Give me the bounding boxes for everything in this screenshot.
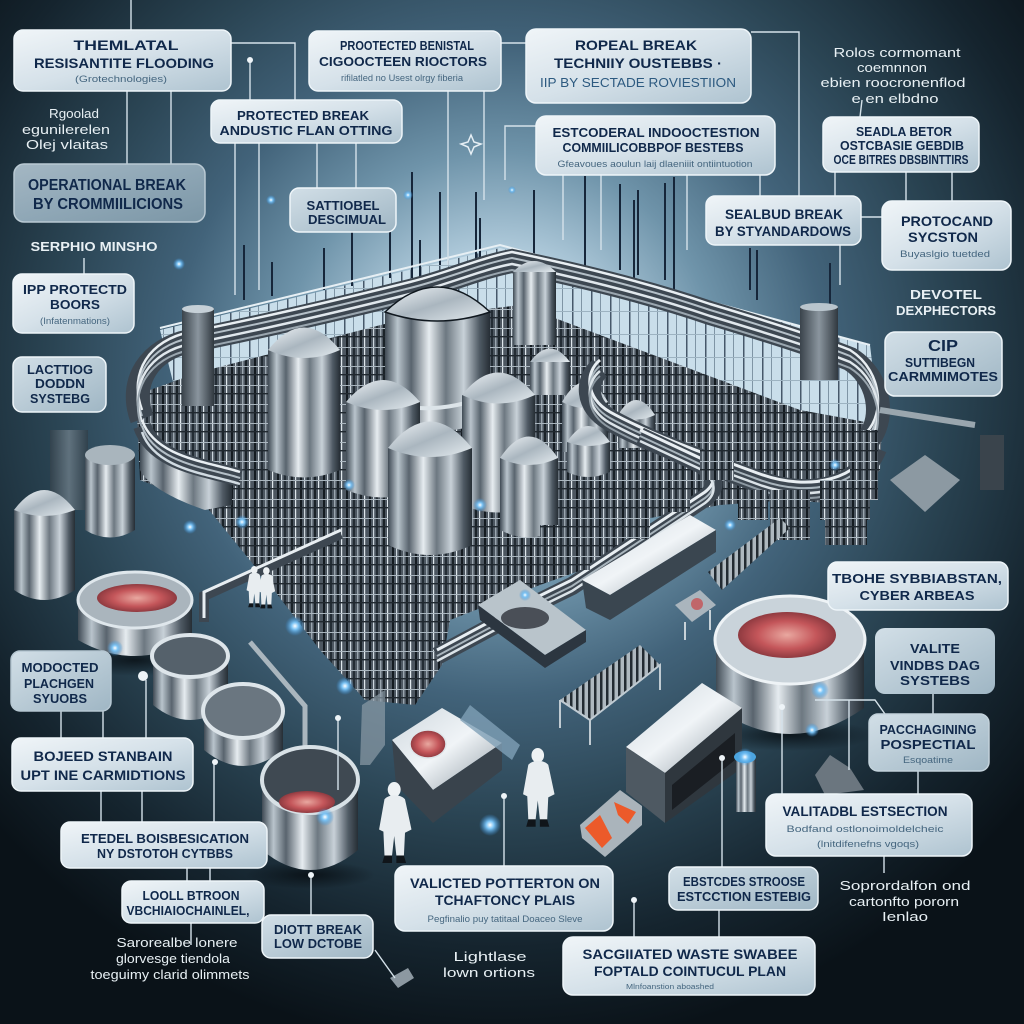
tray rack — [708, 518, 790, 590]
callout: operational break — [14, 164, 205, 222]
callout: sattiobel: DESCIMUAL — [308, 213, 386, 227]
left frame machine — [50, 430, 88, 510]
callout: CIP: SUTTIBEGN — [905, 356, 975, 370]
callout: cyber areas: CYBER ARBEAS — [860, 589, 974, 603]
callout: sealed break: BY STYANDARDOWS — [715, 223, 851, 239]
tank: centre — [462, 372, 535, 512]
left silo — [14, 490, 75, 600]
tank: front right — [500, 436, 558, 538]
callout: vacuum bag systems: VALITE — [910, 642, 960, 656]
tank: right small lower — [567, 426, 610, 477]
callout: validated detection: Bodfand ostlonoimoldelcheic — [786, 824, 944, 835]
annotation: top right — [820, 45, 966, 106]
tank: mid left — [346, 380, 420, 498]
callout: cyber areas — [828, 562, 1008, 610]
right side work stations — [478, 410, 1004, 745]
steel cooler cabinet — [626, 683, 742, 823]
callout: validated protection: VALICTED POTTERTON ON — [410, 875, 600, 891]
callout: packaging — [869, 714, 989, 771]
annotation: bottom right: Ienlao — [882, 909, 928, 924]
annotation: lightlase: Lightlase — [454, 949, 526, 964]
annotation: bottom right — [840, 878, 970, 924]
annotation: top left: egunilerelen — [22, 122, 110, 137]
callout: vacuum bag systems: SYSTEBS — [900, 674, 970, 688]
annotation: top left — [22, 106, 110, 152]
callout: thermal flooring: THEMLATAL — [74, 37, 179, 53]
callout: modocted plachgen — [11, 651, 111, 711]
callout: technology systems — [526, 29, 751, 103]
callout: acoustic plan — [211, 100, 402, 143]
callout: packaging: POSPECTIAL — [880, 738, 976, 752]
annotation: top right: Rolos cormomant — [834, 45, 961, 60]
shadow under main pot — [245, 861, 375, 889]
callout: seal doors: SEADLA BETOR — [856, 125, 952, 139]
callout: CIP: CARMMIMOTES — [888, 370, 998, 384]
shadow under pot — [65, 644, 205, 676]
callout: waste control plan: Mlnfoanstion aboashed — [626, 984, 714, 991]
ring pot C — [203, 684, 283, 766]
left mixer tanks — [85, 445, 135, 538]
callout: looll — [122, 881, 264, 923]
connector end dots — [138, 57, 785, 903]
callout: storage estimation: EBSTCDES STROOSE — [683, 875, 805, 889]
sparkle icon — [461, 135, 481, 154]
callout: vacuum bag systems — [875, 628, 995, 694]
callout: storage estimation: ESTCCTION ESTEBIG — [677, 890, 811, 904]
callout: seal doors: OCE BITRES DBSBINTTIRS — [834, 153, 968, 167]
callout: protected reactors: CIGOOCTEEN RIOCTORS — [319, 55, 487, 69]
callout: protected reactors: rifilatled no Usest olrgy fiberia — [341, 73, 464, 84]
callout: looll: VBCHIAIOCHAINLEL, — [126, 904, 250, 918]
callout: modocted plachgen: PLACHGEN — [24, 677, 94, 691]
tank: right column — [800, 303, 838, 380]
left side equipment — [14, 430, 385, 889]
callout: IPP doors — [13, 274, 134, 333]
pot with meat — [78, 572, 192, 656]
callout: lactting systems — [13, 357, 106, 412]
annotation: devotel: DEXPHECTORS — [896, 303, 996, 318]
main ring pipe bundle — [138, 252, 878, 484]
callout: technology systems: ROPEAL BREAK — [575, 37, 697, 53]
callout: CIP: CIP — [928, 338, 958, 355]
blue status lights — [107, 186, 841, 836]
annotation: devotel: DEVOTEL — [910, 287, 982, 302]
table with meat trays — [478, 580, 586, 668]
tank: large dome — [385, 287, 490, 431]
callout: sealed break — [706, 196, 861, 245]
callout: industrial commissioning: Gfeavoues aoulun laij dlaeniiit ontiintuotion — [558, 159, 752, 170]
callout: vacuum bag systems: VINDBS DAG — [890, 659, 980, 673]
callout: diott break — [262, 915, 373, 958]
callout: validated detection: (lnitdifenefns vgoqs) — [817, 839, 919, 850]
callout: thermal flooring: (Grotechnologies) — [75, 74, 167, 85]
callout: etedel: NY DSTOTOH CYTBBS — [97, 847, 233, 861]
worker pair — [247, 566, 275, 608]
annotation: top right: ebien roocronenflod — [820, 75, 966, 90]
tank: rear tall — [513, 261, 556, 345]
tank: right small upper — [562, 382, 608, 452]
annotation: lightlase: lown ortions — [443, 965, 536, 980]
callout: acoustic plan: PROTECTED BREAK — [237, 109, 369, 123]
callout: sattiobel: SATTIOBEL — [306, 199, 380, 213]
callout: lactting systems: LACTTIOG — [27, 363, 93, 377]
small trolley with trays — [675, 590, 716, 640]
callout: operational break: BY CROMMIILICIONS — [33, 196, 183, 213]
callout: waste control plan — [563, 937, 815, 995]
callout: packaging: PACCHAGINING — [880, 723, 976, 737]
annotation: bottom right: cartonfto pororn — [849, 894, 959, 909]
orange tray — [580, 790, 642, 857]
callout: looll: LOOLL BTROON — [142, 889, 240, 903]
worker near main pot — [379, 782, 411, 863]
callout: lactting systems: SYSTEBG — [30, 392, 90, 406]
annotation: lightlase — [443, 949, 536, 980]
callout: validated detection — [766, 794, 972, 856]
callout: storage estimation — [669, 867, 818, 910]
annotation: bottom left: Sarorealbe lonere — [116, 935, 238, 950]
callout: industrial commissioning — [536, 116, 775, 175]
callout: modocted plachgen: SYUOBS — [33, 692, 87, 706]
tank: small rear centre — [530, 348, 570, 395]
callout: technology systems: TECHNIIY OUSTEBBS · — [554, 55, 722, 71]
tank: front centre — [388, 422, 472, 555]
callout: thermal flooring — [14, 30, 231, 91]
callout: diott break: LOW DCTOBE — [274, 937, 362, 951]
back glass gallery — [160, 248, 880, 430]
pipe network front — [204, 360, 876, 661]
annotation: bottom left: toeguimy clarid olimmets — [90, 967, 250, 982]
annotation: top right: coemnnon — [857, 60, 927, 75]
machine blocks — [540, 430, 878, 570]
callout: IPP doors: BOORS — [50, 298, 100, 312]
dense machinery mass — [136, 305, 882, 705]
callout: stanbain: BOJEED STANBAIN — [34, 748, 172, 764]
callout: diott break: DIOTT BREAK — [274, 923, 362, 937]
callout: etedel: ETEDEL BOISBESICATION — [81, 832, 249, 846]
callout: validated protection — [395, 866, 613, 931]
annotation: bottom right: Soprordalfon ond — [840, 878, 970, 893]
annotation: devotel — [896, 287, 996, 318]
tank: left — [268, 328, 340, 478]
callout: thermal flooring: RESISANTITE FLOODING — [34, 55, 214, 71]
annotation: serphio minsho: SERPHIO MINSHO — [30, 239, 158, 254]
callout: acoustic plan: ANDUSTIC FLAN OTTING — [220, 124, 392, 138]
annotation: bottom left — [90, 935, 250, 982]
callout: industrial commissioning: ESTCODERAL INDOOCTESTION — [552, 126, 760, 140]
callout: seal doors — [823, 117, 979, 172]
annotation: top left: Olej vlaitas — [26, 137, 109, 152]
callout: CIP — [885, 332, 1002, 396]
callout: seal doors: OSTCBASIE GEBDIB — [840, 139, 964, 153]
long steel table — [582, 515, 716, 620]
callout: stanbain — [12, 738, 193, 791]
small trolley — [360, 690, 385, 765]
callout: lactting systems: DODDN — [35, 377, 85, 391]
workers — [247, 566, 555, 863]
callout: protocol system: PROTOCAND — [901, 213, 993, 229]
callout: etedel — [61, 822, 267, 868]
floor pad — [390, 968, 414, 988]
callout: sealed break: SEALBUD BREAK — [725, 206, 843, 222]
support columns left — [140, 440, 232, 510]
pipe over large tank — [375, 395, 490, 408]
callout: operational break: OPERATIONAL BREAK — [28, 177, 186, 194]
callout: modocted plachgen: MODOCTED — [22, 661, 98, 675]
callout: validated detection: VALITADBL ESTSECTION — [782, 803, 948, 819]
callout: industrial commissioning: COMMIILICOBBPOF BESTEBS — [562, 141, 744, 155]
callout: validated protection: Pegfinalio puy tatitaal Doaceo Sleve — [428, 914, 582, 925]
annotation: top right: e en elbdno — [852, 91, 938, 106]
panel: central processing plant — [136, 172, 882, 705]
callout: protected reactors — [309, 31, 501, 91]
callout: packaging: Esqoatime — [903, 755, 953, 766]
callout: cyber areas: TBOHE SYBBIABSTAN, — [832, 572, 1002, 586]
right wall unit — [880, 410, 1004, 512]
callout: stanbain: UPT INE CARMIDTIONS — [20, 767, 186, 783]
callout: waste control plan: SACGIIATED WASTE SWABEE — [582, 946, 798, 962]
tank: left column — [182, 305, 214, 406]
delivery pipe — [250, 642, 305, 780]
tank: far right small — [618, 400, 655, 448]
annotation: top left: Rgoolad — [49, 106, 99, 121]
railing — [160, 245, 870, 345]
conveyor table — [560, 645, 660, 745]
callout: sattiobel — [290, 188, 396, 232]
centre table with mince — [392, 705, 520, 823]
callout: technology systems: IIP BY SECTADE ROVIESTIION — [540, 76, 736, 90]
callout: protocol system: Buyaslgio tuetded — [900, 249, 990, 260]
worker near cooler — [523, 748, 555, 827]
ring pot B — [152, 635, 228, 720]
callout: IPP doors: (Infatenmations) — [40, 316, 110, 327]
callout: waste control plan: FOPTALD COINTUCUL PLAN — [594, 963, 786, 979]
main pot with mince — [262, 747, 358, 870]
small valve unit — [815, 755, 864, 795]
large meat pot — [705, 596, 875, 751]
vertical posts — [244, 172, 830, 320]
annotation: bottom left: glorvesge tiendola — [116, 951, 231, 966]
callout: protocol system — [882, 201, 1011, 270]
callout: protocol system: SYCSTON — [908, 229, 978, 245]
callout: IPP doors: IPP PROTECTD — [23, 283, 127, 297]
callout: protected reactors: PROOTECTED BENISTAL — [340, 39, 474, 53]
canister — [734, 751, 756, 812]
callout: validated protection: TCHAFTONCY PLAIS — [435, 892, 575, 908]
